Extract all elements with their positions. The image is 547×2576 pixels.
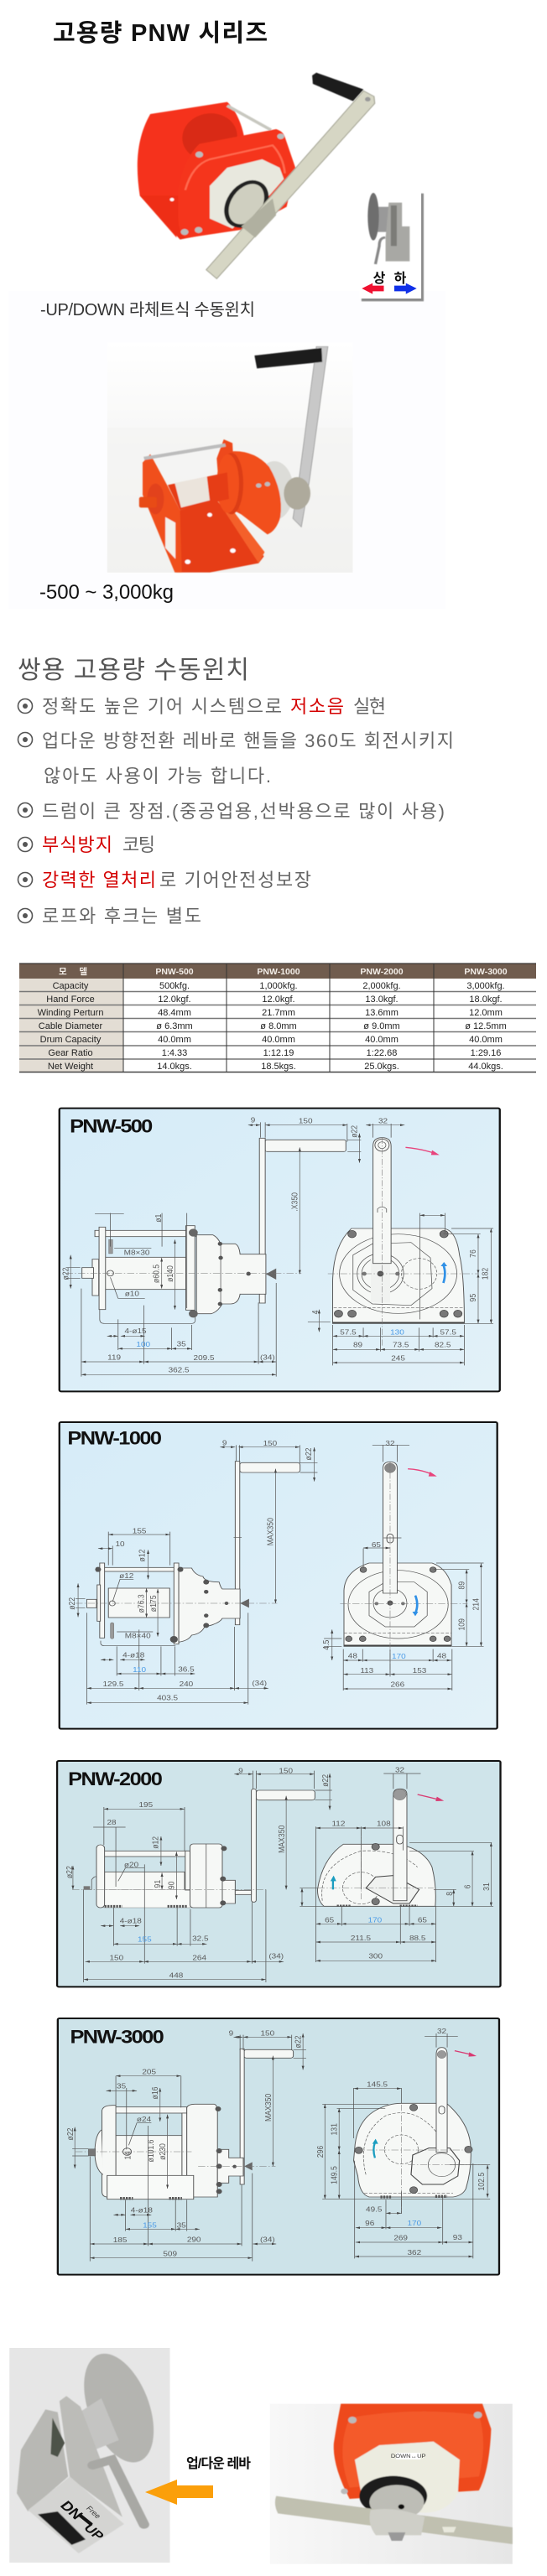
- PNW-500 dimensions: 95: [468, 1294, 477, 1301]
- continuation line: 않아도 사용이 가능 합니다.: [44, 766, 271, 787]
- PNW-3000 dimensions: ø101.6: [147, 2140, 155, 2162]
- row: drum capacity: 40.0mm: [365, 1035, 399, 1045]
- row: hand force: 12.0kgf.: [158, 995, 191, 1005]
- PNW-500 dimensions: M8×30: [124, 1249, 149, 1257]
- PNW-1000 dimensions: 170: [392, 1653, 406, 1660]
- PNW-1000 dimensions: 4.5: [321, 1640, 331, 1650]
- subtitle: ratchet winch: -UP/DOWN 라체트식 수동윈치: [40, 300, 255, 319]
- PNW-3000 dimensions: 149.5: [330, 2166, 339, 2184]
- PNW-2000 dimensions: 31: [482, 1883, 491, 1891]
- PNW-2000 dimensions: 65: [418, 1916, 427, 1924]
- PNW-3000 dimensions: (34): [260, 2236, 275, 2243]
- inset photo: lever direction with up/down arrows: 하: [394, 271, 407, 286]
- row: hand force: [46, 995, 503, 1005]
- row: gear ratio: Gear Ratio: [48, 1048, 93, 1058]
- PNW-2000 dimensions: 195: [139, 1801, 153, 1809]
- PNW-500 dimensions: [61, 1116, 493, 1377]
- row: net weight: Net Weight: [48, 1062, 93, 1072]
- bullet line 5: 로 기어안전성보장: [159, 870, 311, 891]
- PNW-500 dimensions: 4: [311, 1311, 320, 1314]
- row: capacity: 3,000kfg.: [466, 981, 505, 991]
- PNW-3000 dimensions: 509: [163, 2250, 177, 2258]
- arrow: pointing to lever: [145, 2480, 213, 2505]
- PNW-1000 dimensions: 214: [471, 1598, 481, 1611]
- PNW-3000 model label: PNW-3000: [70, 2027, 164, 2048]
- PNW-3000 dimensions: [65, 2028, 490, 2262]
- PNW-3000 dimensions: 296: [315, 2146, 325, 2158]
- PNW-500 dimensions: 209.5: [194, 1354, 215, 1362]
- row: hand force: 13.0kgf.: [365, 995, 399, 1005]
- row: drum capacity: [40, 1035, 503, 1045]
- PNW-1000 dimensions: ø12: [138, 1550, 146, 1561]
- row: gear ratio: 1:22.68: [367, 1048, 397, 1058]
- table header row: PNW-3000: [464, 967, 508, 977]
- row: hand force: 18.0kgf.: [469, 995, 503, 1005]
- table header row: PNW-2000: [360, 967, 404, 977]
- PNW-2000 dimensions: 150: [110, 1954, 123, 1962]
- PNW-3000 dimensions: 102.5: [477, 2173, 486, 2190]
- PNW-2000 dimensions: ø22: [320, 1774, 330, 1787]
- row: cable diameter: Cable Diameter: [39, 1021, 103, 1031]
- bullet line 4: 코팅: [122, 834, 155, 855]
- PNW-1000 dimensions: 110: [133, 1666, 146, 1674]
- PNW-2000 dimensions: 65: [325, 1916, 334, 1924]
- PNW-3000 dimensions: 9: [229, 2029, 233, 2037]
- PNW-3000 dimensions: 49.5: [366, 2205, 382, 2213]
- PNW-500 side view: [65, 1138, 346, 1323]
- PNW-2000 dimensions: 4-ø18: [120, 1917, 142, 1925]
- PNW-1000 front view: [340, 1462, 467, 1675]
- title: 고용량 PNW 시리즈: [53, 19, 268, 47]
- panel: PNW-3000 drawing: [58, 2018, 499, 2275]
- PNW-2000 dimensions: (34): [268, 1952, 284, 1961]
- PNW-3000 dimensions: 35: [117, 2082, 126, 2090]
- PNW-500 dimensions: 182: [481, 1268, 490, 1280]
- row: capacity: Capacity: [53, 981, 89, 991]
- PNW-3000 dimensions: 185: [113, 2236, 127, 2244]
- PNW-3000 dimensions: 96: [365, 2220, 374, 2227]
- PNW-3000 dimensions: ø22: [65, 2128, 75, 2140]
- PNW-2000 dimensions: 264: [192, 1954, 206, 1962]
- PNW-1000 dimensions: 403.5: [157, 1694, 178, 1702]
- PNW-2000 dimensions: 6: [463, 1885, 472, 1888]
- inset photo: lever direction with up/down arrows: 상: [373, 271, 386, 286]
- table header row: PNW-1000: [257, 967, 300, 977]
- PNW-2000 dimensions: [65, 1766, 493, 1982]
- PNW-500 dimensions: 150: [299, 1117, 313, 1124]
- row: cable diameter: [39, 1021, 507, 1031]
- PNW-1000 dimensions: [68, 1439, 484, 1705]
- capacity range text: -500 ~ 3,000kg: [39, 581, 174, 604]
- PNW-500 dimensions: 76: [468, 1249, 477, 1258]
- row: cable diameter: ø 9.0mm: [363, 1021, 400, 1031]
- PNW-2000 dimensions: 108: [377, 1820, 391, 1828]
- PNW-1000 dimensions: 240: [180, 1680, 193, 1688]
- PNW-2000 dimensions: 448: [169, 1971, 183, 1979]
- PNW-1000 dimensions: 65: [372, 1541, 381, 1549]
- row: drum capacity: 40.0mm: [469, 1035, 503, 1045]
- feature list: [18, 696, 454, 927]
- PNW-1000 dimensions: ø22: [304, 1448, 313, 1460]
- PNW-500 dimensions: 57.5: [340, 1328, 357, 1336]
- PNW-3000 dimensions: ø230: [158, 2143, 167, 2160]
- bullet line 1: 실현: [353, 696, 386, 717]
- row: drum capacity: 40.0mm: [262, 1035, 295, 1045]
- PNW-3000 dimensions: ø24: [137, 2116, 151, 2123]
- PNW-500 dimensions: 130: [390, 1328, 404, 1336]
- bullet line 5: 강력한 열처리: [42, 870, 156, 891]
- row: net weight: 44.0kgs.: [468, 1062, 503, 1072]
- row: capacity: 1,000kfg.: [259, 981, 298, 991]
- table header row: PNW-500: [155, 967, 194, 977]
- photo: up/down lever mechanism: UP: [81, 2521, 107, 2543]
- PNW-500 dimensions: 73.5: [393, 1341, 409, 1349]
- PNW-2000 dimensions: 112: [331, 1820, 345, 1828]
- PNW-1000 dimensions: 4-ø18: [122, 1651, 144, 1659]
- PNW-3000 dimensions: MAX350: [264, 2094, 273, 2122]
- table header row: 모 델: [59, 966, 87, 977]
- PNW-3000 dimensions: 362: [407, 2249, 421, 2257]
- PNW-2000 dimensions: 155: [138, 1935, 152, 1944]
- label: up/down lever: 업/다운 레바: [186, 2456, 251, 2471]
- table header row: [59, 966, 508, 977]
- PNW-3000 dimensions: 150: [261, 2029, 274, 2037]
- PNW-500 dimensions: 82.5: [435, 1341, 451, 1349]
- photo: up/down lever mechanism: Free: [84, 2505, 102, 2520]
- inset photo: lever direction with up/down arrows: [359, 191, 424, 301]
- PNW-1000 dimensions: ø175: [148, 1595, 158, 1612]
- photo: up/down lever mechanism: DN: [57, 2498, 86, 2522]
- bullet line 6: 로프와 후크는 별도: [42, 906, 201, 927]
- PNW-1000 model label: PNW-1000: [67, 1428, 162, 1449]
- row: gear ratio: 1:12.19: [263, 1048, 294, 1058]
- PNW-2000 front view: [317, 1789, 444, 1906]
- PNW-1000 dimensions: 109: [457, 1618, 466, 1631]
- bullet line 3: 드럼이 큰 장점.(중공업용,선박용으로 많이 사용): [42, 801, 445, 822]
- PNW-500 model label: PNW-500: [70, 1116, 153, 1137]
- PNW-3000 dimensions: 32: [437, 2028, 446, 2035]
- PNW-2000 dimensions: 32: [395, 1766, 404, 1774]
- PNW-2000 dimensions: 211.5: [351, 1935, 371, 1942]
- row: cable diameter: ø 6.3mm: [156, 1021, 193, 1031]
- PNW-1000 dimensions: 32: [385, 1440, 395, 1447]
- bullet line 4: 부식방지: [42, 834, 112, 855]
- PNW-500 dimensions: ø22: [61, 1268, 70, 1280]
- PNW-1000 dimensions: 48: [437, 1652, 446, 1659]
- row: hand force: 12.0kgf.: [262, 995, 295, 1005]
- bullet line 4: [18, 834, 155, 855]
- PNW-500 dimensions: 89: [353, 1341, 362, 1349]
- row: net weight: [48, 1062, 503, 1072]
- PNW-2000 dimensions: 170: [368, 1916, 382, 1924]
- PNW-2000 dimensions: 28: [107, 1819, 117, 1826]
- PNW-3000 dimensions: 269: [393, 2234, 408, 2242]
- row: winding perturn: [38, 1008, 503, 1018]
- PNW-500 dimensions: 362.5: [169, 1366, 190, 1374]
- row: winding perturn: 21.7mm: [262, 1008, 295, 1018]
- heading: product name: 쌍용 고용량 수동윈치: [18, 657, 249, 684]
- PNW-3000 dimensions: 4-ø18: [131, 2206, 153, 2214]
- PNW-500 dimensions: ø22: [350, 1125, 359, 1138]
- PNW-2000 dimensions: MAX350: [278, 1826, 286, 1853]
- PNW-1000 dimensions: 129.5: [102, 1680, 123, 1688]
- row: cable diameter: ø 8.0mm: [260, 1021, 297, 1031]
- row: winding perturn: 12.0mm: [469, 1008, 503, 1018]
- PNW-3000 dimensions: 290: [187, 2236, 201, 2243]
- panel: PNW-1000 drawing: [60, 1422, 498, 1729]
- PNW-500 dimensions: 4-ø15: [124, 1327, 147, 1335]
- PNW-3000 front view: [354, 2048, 490, 2214]
- PNW-500 dimensions: ø140: [166, 1265, 175, 1282]
- PNW-3000 dimensions: 155: [143, 2221, 157, 2230]
- PNW-1000 dimensions: ø76.3: [137, 1594, 146, 1613]
- PNW-2000 model label: PNW-2000: [68, 1769, 163, 1790]
- PNW-2000 dimensions: 150: [279, 1767, 293, 1774]
- PNW-500 front view: [328, 1138, 479, 1348]
- row: cable diameter: ø 12.5mm: [465, 1021, 507, 1031]
- row: capacity: 2,000kfg.: [362, 981, 401, 991]
- PNW-1000 dimensions: 9: [222, 1439, 227, 1446]
- PNW-1000 dimensions: 36.5: [178, 1665, 195, 1673]
- PNW-2000 dimensions: 9: [238, 1767, 243, 1774]
- PNW-3000 dimensions: ø16: [151, 2087, 159, 2099]
- row: winding perturn: 13.6mm: [365, 1008, 399, 1018]
- PNW-3000 dimensions: 131: [330, 2123, 339, 2136]
- PNW-500 dimensions: (34): [260, 1353, 275, 1362]
- PNW-1000 dimensions: (34): [252, 1680, 267, 1687]
- PNW-3000 dimensions: 145.5: [367, 2080, 388, 2089]
- panel: PNW-2000 drawing: [57, 1761, 501, 1987]
- row: gear ratio: 1:29.16: [471, 1048, 501, 1058]
- PNW-500 dimensions: 100: [136, 1341, 150, 1348]
- PNW-2000 dimensions: 32.5: [192, 1935, 209, 1943]
- PNW-1000 dimensions: 89: [457, 1581, 466, 1589]
- PNW-500 dimensions: 9: [251, 1116, 255, 1124]
- PNW-500 dimensions: 119: [107, 1353, 121, 1361]
- PNW-1000 dimensions: 155: [133, 1527, 146, 1535]
- photo: red hand winch with handle: [138, 73, 375, 278]
- row: winding perturn: Winding Perturn: [38, 1008, 103, 1018]
- PNW-1000 dimensions: ø22: [68, 1597, 76, 1610]
- PNW-500 dimensions: ø10: [125, 1290, 139, 1298]
- PNW-500 dimensions: 245: [391, 1354, 405, 1362]
- PNW-2000 dimensions: 91: [153, 1880, 162, 1888]
- panel: PNW-500 drawing: [60, 1109, 500, 1391]
- bullet line 2: 업다운 방향전환 레바로 핸들을 360도 회전시키지: [42, 730, 454, 751]
- PNW-500 dimensions: ø60.5: [152, 1265, 161, 1283]
- row: net weight: 18.5kgs.: [261, 1062, 296, 1072]
- PNW-1000 dimensions: ø12: [119, 1572, 133, 1580]
- bullet line 1: [18, 696, 386, 717]
- photo: red winch cover with handle bar: [270, 2404, 513, 2564]
- PNW-500 dimensions: 35: [177, 1340, 186, 1348]
- PNW-2000 dimensions: 300: [368, 1952, 383, 1961]
- PNW-500 dimensions: ø1: [154, 1214, 163, 1223]
- photo: up/down lever mechanism: [9, 2348, 170, 2563]
- row: winding perturn: 48.4mm: [158, 1008, 191, 1018]
- PNW-500 dimensions: 57.5: [440, 1328, 456, 1336]
- row: gear ratio: [48, 1048, 501, 1058]
- PNW-2000 side view: [72, 1789, 315, 1908]
- PNW-2000 dimensions: ø20: [124, 1861, 138, 1869]
- PNW-1000 side view: [76, 1462, 300, 1646]
- PNW-3000 dimensions: 35: [177, 2221, 186, 2230]
- PNW-3000 dimensions: 14: [123, 2152, 133, 2159]
- PNW-3000 side view: [76, 2049, 294, 2199]
- specification table: [19, 963, 536, 1072]
- row: hand force: Hand Force: [46, 995, 95, 1005]
- PNW-1000 dimensions: 10: [116, 1540, 125, 1548]
- photo: red winch cover with handle bar: DOWN↔UP: [391, 2454, 426, 2459]
- PNW-1000 dimensions: 153: [413, 1667, 426, 1675]
- bullet line 5: [18, 870, 311, 891]
- row: capacity: 500kfg.: [159, 981, 190, 991]
- PNW-1000 dimensions: 113: [360, 1667, 373, 1675]
- PNW-500 dimensions: 32: [378, 1117, 388, 1124]
- PNW-2000 dimensions: 8: [445, 1892, 454, 1896]
- PNW-2000 dimensions: ø22: [65, 1866, 74, 1878]
- PNW-1000 dimensions: M8×40: [125, 1632, 151, 1639]
- PNW-3000 dimensions: 205: [142, 2068, 156, 2075]
- PNW-500 dimensions: .X350: [290, 1192, 300, 1212]
- row: drum capacity: 40.0mm: [158, 1035, 191, 1045]
- row: net weight: 25.0kgs.: [364, 1062, 399, 1072]
- PNW-3000 dimensions: ø22: [294, 2036, 303, 2048]
- PNW-1000 dimensions: 150: [263, 1440, 277, 1447]
- PNW-1000 dimensions: MAX350: [266, 1518, 275, 1545]
- photo: orange hand winch side view: [107, 342, 352, 573]
- row: net weight: 14.0kgs.: [157, 1062, 192, 1072]
- row: capacity: [53, 981, 505, 991]
- PNW-1000 dimensions: 48: [348, 1652, 357, 1659]
- PNW-3000 dimensions: 93: [453, 2234, 462, 2241]
- PNW-3000 dimensions: 170: [407, 2220, 421, 2227]
- PNW-2000 dimensions: ø12: [151, 1836, 160, 1849]
- PNW-2000 dimensions: 90: [167, 1882, 176, 1889]
- bullet line 1: 저소음: [290, 696, 344, 717]
- bullet line 1: 정확도 높은 기어 시스템으로: [42, 696, 282, 717]
- PNW-2000 dimensions: 88.5: [409, 1935, 425, 1942]
- PNW-1000 dimensions: 266: [390, 1680, 404, 1688]
- row: gear ratio: 1:4.33: [162, 1048, 187, 1058]
- row: drum capacity: Drum Capacity: [40, 1035, 102, 1045]
